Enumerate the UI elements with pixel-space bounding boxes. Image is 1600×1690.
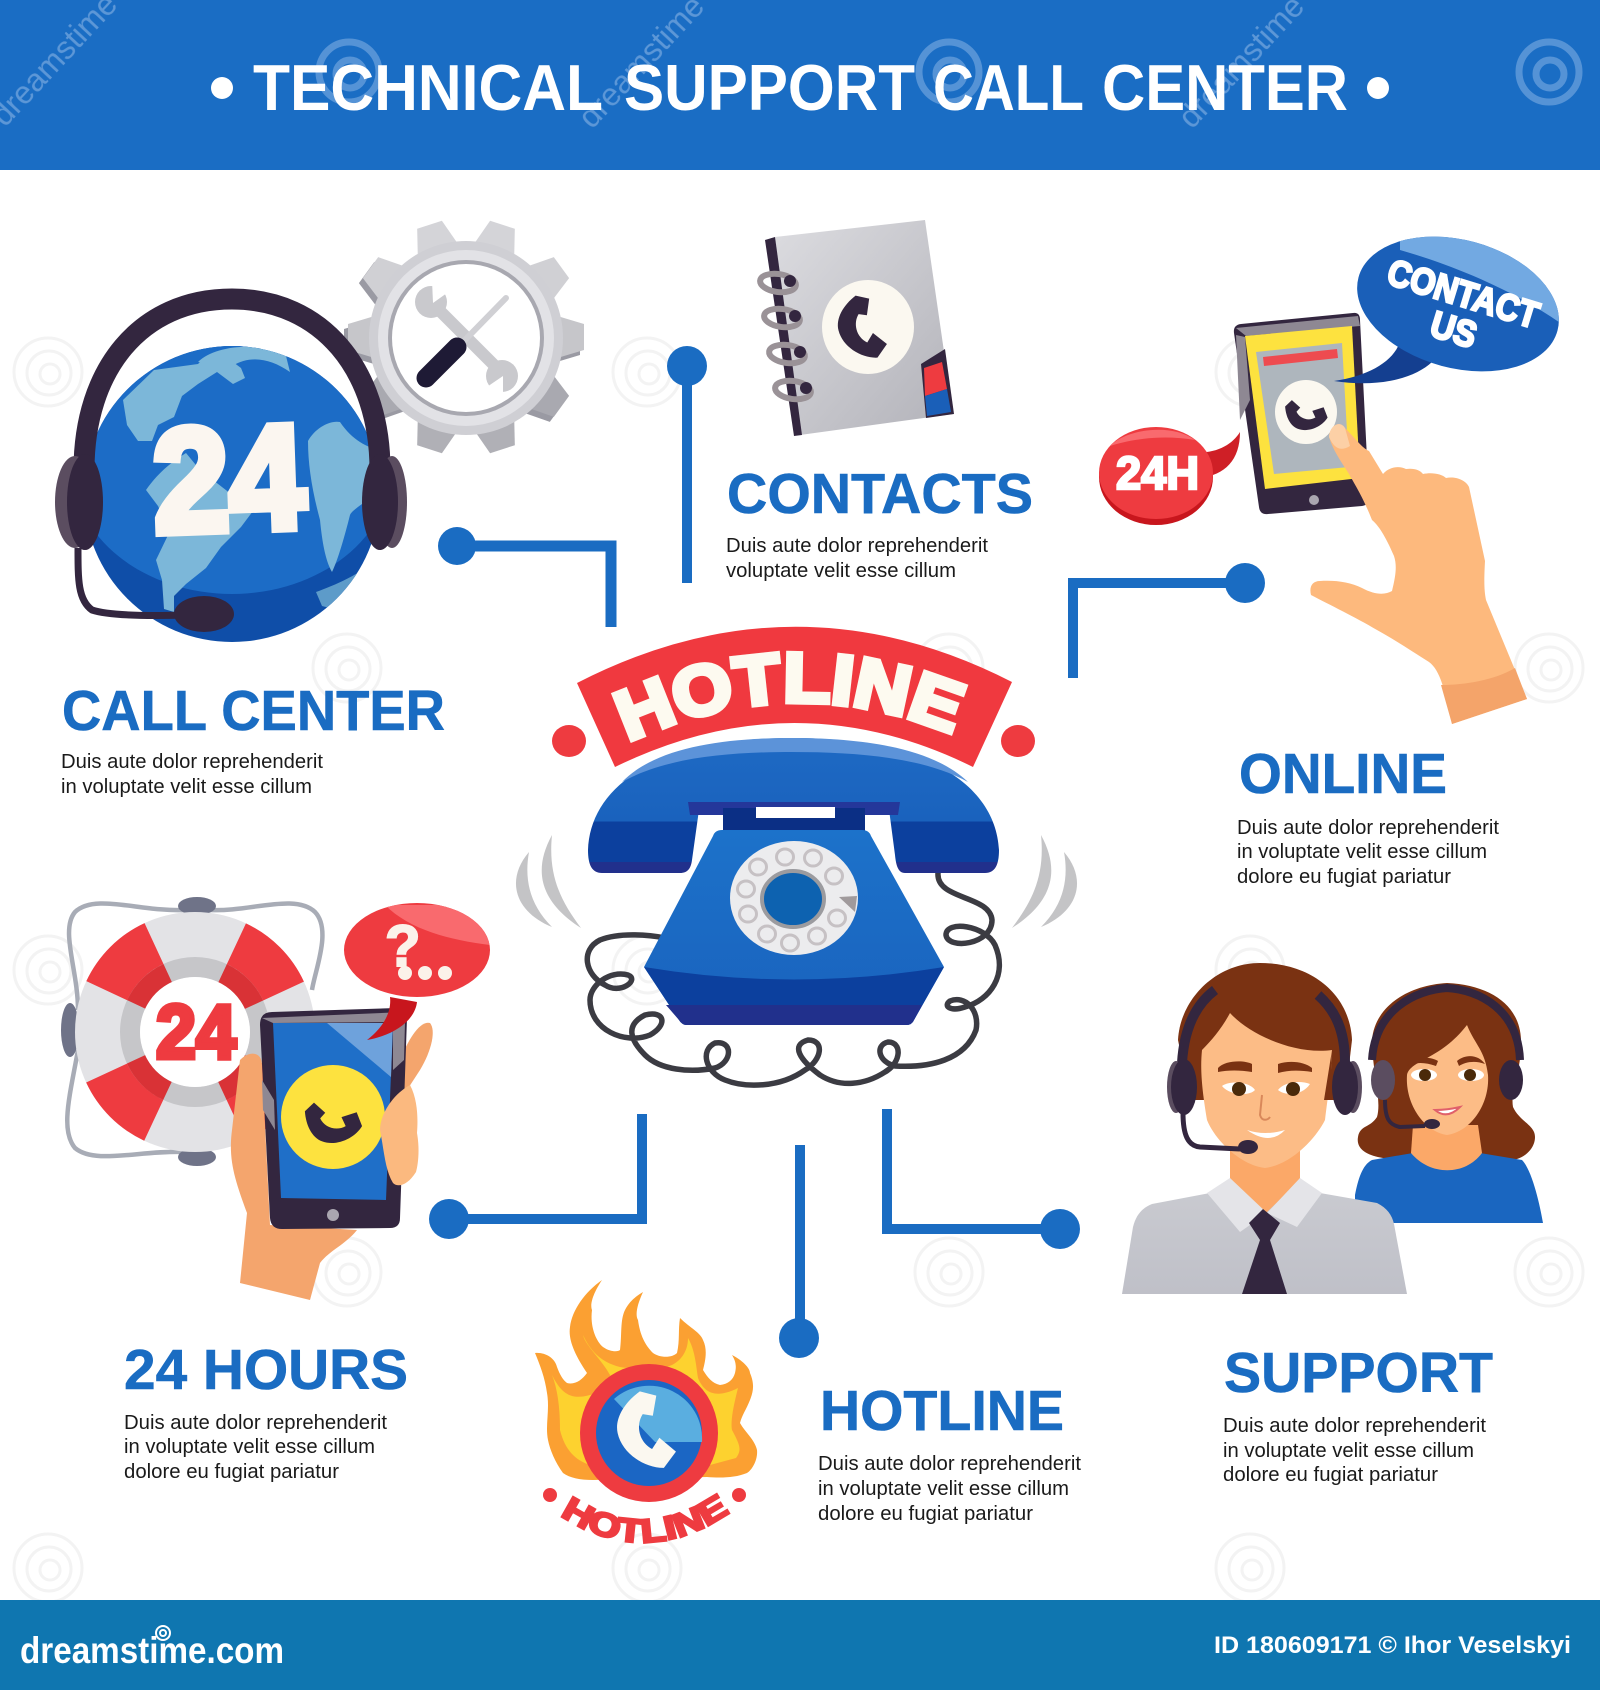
speech bubble: question: ? <box>385 914 420 979</box>
text: call center description: in voluptate velit esse cillum <box>61 776 312 798</box>
title: SUPPORT <box>624 51 915 124</box>
icon: flaming hotline badge: HOTLINE <box>560 1492 731 1544</box>
text: online description <box>1237 817 1499 888</box>
panel: contacts <box>726 220 1033 582</box>
text: 24 hours description <box>124 1412 387 1483</box>
title: CALL <box>933 51 1084 124</box>
speech bubble: contact us: US <box>1426 303 1482 356</box>
handset <box>588 738 999 873</box>
rotary dial <box>730 841 858 955</box>
text: hotline description <box>818 1453 1081 1525</box>
footer credit: ID 180609171 © Ihor Veselskyi <box>1214 1632 1571 1659</box>
banner: hotline <box>552 626 1035 767</box>
text: 24 hours description: dolore eu fugiat pariatur <box>124 1461 339 1483</box>
icon: gear with tools <box>344 218 584 456</box>
text: support description: Duis aute dolor reprehenderit <box>1223 1415 1486 1437</box>
cradle <box>723 808 865 832</box>
icon: address book <box>759 220 954 436</box>
hand <box>1310 424 1527 724</box>
text: call center description <box>61 751 323 798</box>
speech bubble: question <box>344 903 490 1040</box>
text: contacts description: Duis aute dolor reprehenderit <box>726 535 988 557</box>
connector: call center <box>438 527 611 627</box>
heading: online: ONLINE <box>1239 742 1447 806</box>
text: 24 on life ring: 24 <box>156 990 236 1075</box>
text: online description: Duis aute dolor reprehenderit <box>1237 817 1499 839</box>
icon: hand holding phone <box>231 903 490 1300</box>
text: 24 on globe: 24 <box>150 394 308 565</box>
text: 24 hours description: in voluptate velit esse cillum <box>124 1436 375 1458</box>
text: call center description: Duis aute dolor reprehenderit <box>61 751 323 773</box>
center: hotline telephone <box>516 626 1077 1088</box>
text: hotline description: in voluptate velit esse cillum <box>818 1478 1069 1500</box>
icon: smartphone with speech bubbles and hand <box>1099 216 1574 724</box>
heading: support: SUPPORT <box>1224 1341 1493 1405</box>
text: contacts description <box>726 535 988 582</box>
text: support description: dolore eu fugiat pariatur <box>1223 1464 1438 1486</box>
speech bubble: contact us: CONTACT <box>1383 251 1544 336</box>
speech bubble: 24H: 24H <box>1116 447 1199 499</box>
connector: contacts <box>667 346 707 583</box>
footer logo: dreamstime.com <box>20 1630 284 1671</box>
connector: online <box>1073 563 1265 678</box>
connector: hotline <box>779 1145 819 1358</box>
speech bubble: 24H <box>1099 427 1240 525</box>
panel: 24 hours <box>61 897 490 1483</box>
sound waves <box>516 835 1077 928</box>
title: TECHNICAL <box>253 51 603 124</box>
speech bubble: contact us <box>1334 236 1559 384</box>
text: online description: in voluptate velit esse cillum <box>1237 841 1487 863</box>
phone cord <box>587 873 999 1085</box>
heading: 24 hours: 24 HOURS <box>124 1338 408 1402</box>
text: support description <box>1223 1415 1486 1486</box>
connector: 24 hours <box>429 1114 642 1239</box>
footer bar <box>0 1600 1600 1690</box>
title: CENTER <box>1102 51 1348 124</box>
text: contacts description: voluptate velit esse cillum <box>726 560 956 582</box>
title <box>211 51 1389 124</box>
heading: contacts: CONTACTS <box>727 462 1033 526</box>
icon: globe with headset <box>55 299 407 642</box>
telephone base <box>644 830 944 1025</box>
text: 24 hours description: Duis aute dolor reprehenderit <box>124 1412 387 1434</box>
text: hotline description: dolore eu fugiat pariatur <box>818 1503 1033 1525</box>
icon: female operator <box>1355 983 1543 1223</box>
icon: flaming hotline badge <box>535 1280 758 1544</box>
heading: hotline: HOTLINE <box>820 1379 1064 1443</box>
panel: hotline <box>535 1280 1081 1544</box>
icon: life ring <box>61 897 322 1166</box>
panel: call center <box>55 218 584 798</box>
panel: support <box>1122 963 1543 1486</box>
icon: male operator <box>1122 963 1407 1294</box>
text: hotline description: Duis aute dolor reprehenderit <box>818 1453 1081 1475</box>
banner: hotline: HOTLINE <box>610 650 968 743</box>
header banner <box>0 0 1600 170</box>
heading: call center: CALL CENTER <box>62 679 445 743</box>
text: support description: in voluptate velit esse cillum <box>1223 1440 1474 1462</box>
connector: support <box>887 1109 1080 1249</box>
panel: online <box>1099 216 1574 888</box>
text: online description: dolore eu fugiat pariatur <box>1237 866 1451 888</box>
